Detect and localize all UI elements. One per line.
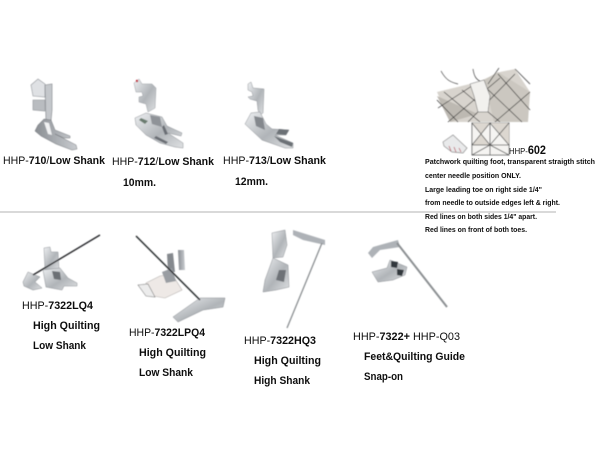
icon: transparent patchwork foot [443,135,467,153]
label: 12mm: 12mm. [235,176,268,188]
text block: HHP-602 description: Large leading toe on right side 1/4" [425,185,542,194]
icon: patchwork square diagram [472,123,509,155]
label: HHP-7322LPQ4: HHP-7322LPQ4 [129,327,206,339]
label: HHP-7322LQ4 [22,300,100,352]
text block: HHP-602 description: Red lines on front of both toes. [425,225,527,234]
label: HHP-7322HQ3 [244,335,321,387]
panel: HHP-7322LQ4 foot with guide [23,235,100,290]
panel: HHP-710 presser foot [31,79,77,150]
label: HHP-713: HHP-713/Low Shank [223,155,327,167]
label: HHP-7322LQ4: High Quilting [33,320,100,332]
label: HHP-7322LQ4: HHP-7322LQ4 [22,300,94,312]
label: HHP-7322 + HHP-Q03: Snap-on [364,371,403,383]
label: HHP-712: HHP-712/Low Shank [112,156,215,168]
text block: HHP-602 description [425,157,595,234]
label: HHP-7322 + HHP-Q03: Feet&Quilting Guide [364,351,465,363]
illustration: quilting with the patchwork foot [437,68,530,122]
label: HHP-7322LQ4: Low Shank [33,340,87,352]
label: HHP-602: HHP-602 [509,143,546,157]
panel: HHP-713 presser foot [245,82,293,148]
label: HHP-7322LPQ4: Low Shank [139,367,194,379]
label: HHP-7322LPQ4: High Quilting [139,347,206,359]
panel: HHP-7322HQ3 foot with guide [263,230,325,328]
label: HHP-7322 + HHP-Q03: HHP-7322+ HHP-Q03 [353,331,460,343]
label: HHP-7322HQ3: High Quilting [254,355,321,367]
panel: HHP-712 presser foot [134,79,183,148]
panel: HHP-7322LPQ4 foot with guide [136,236,225,322]
label: HHP-7322HQ3: HHP-7322HQ3 [244,335,316,347]
label: HHP-7322LPQ4 [129,327,206,379]
text block: HHP-602 description: from needle to outside edges left & right. [425,198,560,207]
text block: HHP-602 description: Red lines on both sides 1/4" apart. [425,212,537,221]
label: HHP-710: HHP-710/Low Shank [3,155,106,167]
label: HHP-7322 + HHP-Q03 [353,331,465,383]
text block: HHP-602 description: center needle position ONLY. [425,171,521,180]
divider line [0,211,556,213]
label: HHP-7322HQ3: High Shank [254,375,311,387]
panel: HHP-7322 foot and HHP-Q03 guide [368,240,447,307]
label: 10mm: 10mm. [123,177,156,189]
